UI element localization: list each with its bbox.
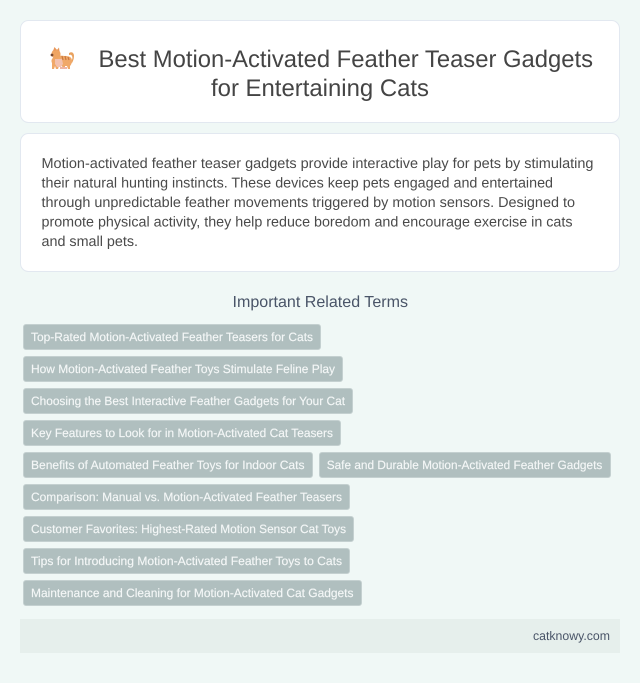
- tag: Comparison: Manual vs. Motion-Activated Feather Teasers: [31, 490, 342, 504]
- footer bar: [20, 619, 620, 653]
- text block: description paragraph: and small pets.: [42, 234, 138, 250]
- footer source text: catknowy.com: [533, 629, 610, 643]
- title: [98, 46, 593, 102]
- tag: [320, 452, 610, 478]
- panel: title card: [20, 20, 620, 122]
- panel: related term tags: [24, 324, 610, 606]
- tag: Key Features to Look for in Motion-Activated Cat Teasers: [31, 426, 333, 440]
- tag: [24, 420, 340, 446]
- text block: description paragraph: through unpredictable feather movements triggered by motion sensors. Designed to: [42, 195, 575, 211]
- panel: description: [20, 134, 620, 272]
- tag: [24, 548, 350, 574]
- text block: description paragraph: promote physical activity, they help reduce boredom and encourage exercise in cats: [42, 215, 572, 231]
- icon: orange cat: [51, 47, 74, 69]
- tag: Choosing the Best Interactive Feather Gadgets for Your Cat: [31, 394, 346, 408]
- tag: Maintenance and Cleaning for Motion-Activated Cat Gadgets: [31, 586, 354, 600]
- tag: [24, 388, 352, 414]
- tag: [24, 484, 350, 510]
- tag: How Motion-Activated Feather Toys Stimulate Feline Play: [31, 362, 335, 376]
- tag: Customer Favorites: Highest-Rated Motion Sensor Cat Toys: [31, 522, 346, 536]
- tag: [24, 452, 312, 478]
- tag: [24, 516, 354, 542]
- heading: important related terms: Important Related Terms: [232, 294, 408, 311]
- tag: Top-Rated Motion-Activated Feather Teasers for Cats: [31, 330, 313, 344]
- tag: [24, 324, 320, 350]
- text block: description paragraph: Motion-activated feather teaser gadgets provide interactive play for pets by stimulating: [42, 156, 594, 172]
- title: for Entertaining Cats: [211, 75, 429, 102]
- title: Best Motion-Activated Feather Teaser Gadgets: [98, 46, 593, 73]
- text block: description paragraph: their natural hunting instincts. These devices keep pets engaged and entertained: [42, 176, 553, 192]
- tag: [24, 356, 342, 382]
- tag: [24, 580, 362, 606]
- text block: description paragraph: [42, 156, 594, 250]
- tag: Benefits of Automated Feather Toys for Indoor Cats: [31, 458, 304, 472]
- tag: Safe and Durable Motion-Activated Feather Gadgets: [327, 458, 602, 472]
- tag: Tips for Introducing Motion-Activated Feather Toys to Cats: [31, 554, 342, 568]
